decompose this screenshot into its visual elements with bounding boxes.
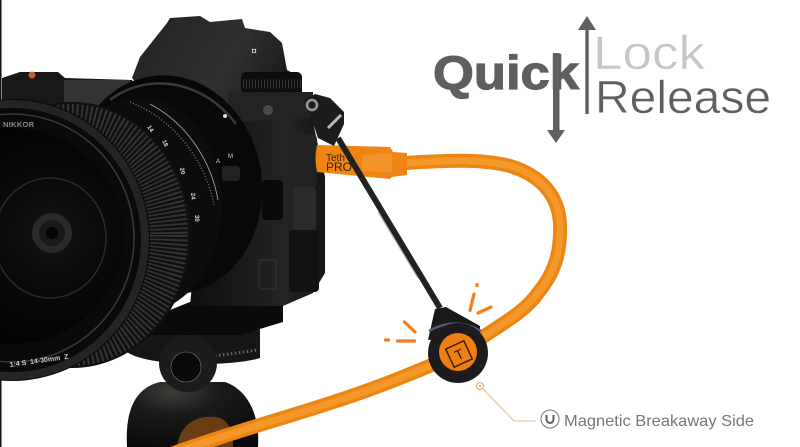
- breakaway magnet connector: [428, 307, 488, 383]
- magnetic cable: [160, 161, 560, 447]
- camera strap anchor: [305, 94, 344, 146]
- lens front: [0, 99, 150, 381]
- title: Lock: Lock: [593, 26, 706, 79]
- title: Quick: Quick: [433, 46, 580, 99]
- tripod plate: [140, 300, 283, 335]
- connector brand text: Teth: [326, 153, 345, 164]
- down arrow: [547, 53, 565, 143]
- A/M switch: A: [216, 159, 220, 165]
- left shoulder: [2, 72, 150, 120]
- tripod head: [127, 323, 260, 447]
- focal length scale: 14: [145, 125, 154, 134]
- T logo: T: [452, 345, 467, 364]
- icon: magnet: [541, 410, 559, 428]
- focal length scale: 20: [178, 167, 185, 176]
- port covers: [292, 134, 317, 188]
- focal length scale: 18: [160, 139, 169, 148]
- command dial: [241, 72, 302, 93]
- callout label: Magnetic Breakaway Side: [564, 413, 754, 430]
- focal length scale: 24: [189, 193, 196, 200]
- lens front: 1:4 S 14-30mm Z: [9, 354, 70, 369]
- ribbed zoom ring: [0, 102, 191, 368]
- focal length scale: [145, 125, 199, 222]
- lens mount ring: [58, 63, 276, 307]
- A/M switch: [216, 154, 240, 181]
- USB connector: [316, 145, 407, 179]
- lens barrel: [58, 97, 240, 313]
- camera body: [2, 16, 325, 306]
- camera body: ⌑: [251, 47, 257, 56]
- focal length scale: 30: [193, 215, 199, 222]
- title: Release: Release: [595, 71, 771, 123]
- lens markings: NIKKOR: [3, 120, 35, 129]
- USB connector: PRO: [326, 160, 352, 174]
- tether strap: [338, 138, 440, 308]
- up arrow: [578, 16, 596, 114]
- locking knob: [159, 334, 217, 392]
- callout: magnetic breakaway side: [476, 382, 754, 430]
- grip: [190, 118, 325, 306]
- title logo: [433, 16, 771, 143]
- viewfinder prism: [132, 16, 325, 160]
- impact sparks: [386, 284, 491, 341]
- left edge strip: [0, 0, 2, 447]
- A/M switch: M: [228, 154, 233, 160]
